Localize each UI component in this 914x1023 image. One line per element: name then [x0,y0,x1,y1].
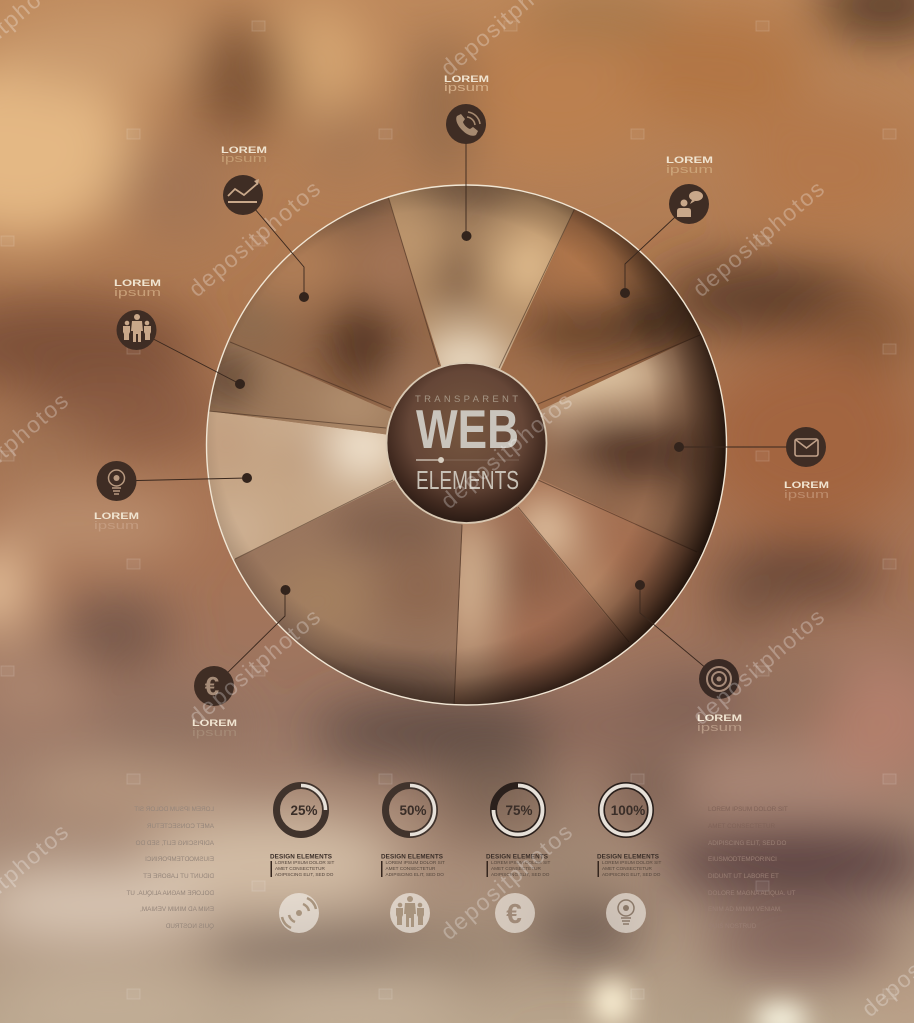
segment: right [539,347,719,541]
watermark text: depositphotos [687,176,829,302]
watermark text: depositphotos [435,819,577,945]
text block: mirrored list: LOREM IPSUM DOLOR SIT [134,806,214,813]
hub title: ELEMENTS [416,465,519,495]
callout: mail: LOREM [784,480,829,491]
progress ring: 100% [602,786,650,834]
text block: right list: LOREM IPSUM DOLOR SIT [708,806,788,813]
segment: lower left [234,480,462,693]
caption: ring 2: DESIGN ELEMENTS [381,854,443,860]
callout: euro: € [205,671,219,701]
segment: left band [210,342,392,434]
text block: right list: ENIM AD MINIM VENIAM, [708,906,782,913]
progress ring: 50% [386,786,434,834]
icon: euro [495,893,535,933]
progress ring: 100%: 100% [611,803,645,818]
caption: ring 1: DESIGN ELEMENTS [270,854,332,860]
outer ring [206,185,726,705]
progress ring: 75% [494,786,542,834]
caption: ring 3: LOREM IPSUM DOLOR SIT [491,860,551,865]
text block: mirrored list: QUIS NOSTRUD [165,923,214,930]
segment dividers [208,196,700,706]
pie wheel [206,184,728,706]
callout: euro [192,585,290,739]
watermark text: depositphotos [183,176,325,302]
caption: ring 2 [381,854,445,877]
text block: right list: AMET CONSECTETUR [708,823,776,830]
segment: left bright [207,411,395,560]
callout: chart [221,145,309,302]
text block: mirrored list: DOLORE MAGNA ALIQUA. UT [126,890,214,897]
caption: ring 1 [270,854,335,877]
callout: phone: ipsum [444,82,489,94]
rim shadow [206,185,726,705]
hub title: WEB [416,398,519,460]
text block: mirrored list: DIDUNT UT LABORE ET [143,873,214,880]
callout: chart: LOREM [221,145,267,156]
text block: mirrored list: EIUSMODTEMPORINCI [145,856,214,863]
hub title: TRANSPARENT [415,394,518,405]
segment: top bright [389,186,574,370]
segment: lower right [516,480,644,614]
progress ring: 25%: 25% [290,803,318,818]
callout: phone: LOREM [444,74,489,85]
watermark text: depositphotos [435,388,577,514]
progress ring: 25% [276,786,326,834]
callout: group: ipsum [114,287,161,299]
callout: bulb: LOREM [94,511,139,522]
icon: bulb [606,893,646,933]
caption: ring 4 [597,854,662,877]
bottom light spots [592,980,807,1023]
text block: right list: EIUSMODTEMPORINCI [708,856,777,863]
callout: target: LOREM [697,713,742,724]
icon: signal [279,893,319,933]
caption: ring 3: AMET CONSECTETUR [491,866,542,871]
caption: ring 2: ADIPISCING ELIT, SED DO [386,872,444,877]
text block: mirrored list [126,806,214,930]
callout: target: ipsum [697,722,742,734]
callout: euro: ipsum [192,727,237,739]
callout: group [114,278,245,389]
icon: people [390,893,430,933]
callout: person chat [620,155,713,298]
text block: right list: ADIPISCING ELIT, SED DO [708,840,786,847]
callout: mail: ipsum [784,489,829,501]
callout: group: LOREM [114,278,161,289]
caption: ring 3 [486,854,551,877]
progress ring: 50%: 50% [399,803,427,818]
caption: ring 1: AMET CONSECTETUR [275,866,326,871]
callout: bulb [94,461,252,532]
caption: ring 3: DESIGN ELEMENTS [486,854,548,860]
text block: right list [708,806,796,930]
caption: ring 1: ADIPISCING ELIT, SED DO [275,872,334,877]
callout: chart: ipsum [221,153,267,165]
caption: ring 1: LOREM IPSUM DOLOR SIT [275,860,335,865]
text block: right list: QUIS NOSTRUD [708,923,757,930]
hub title [415,394,519,495]
text block: mirrored list: AMET CONSECTETUR [146,823,214,830]
text block: right list: DOLORE MAGNA ALIQUA. UT [708,890,796,897]
caption: ring 4: ADIPISCING ELIT, SED DO [602,872,661,877]
segment: bottom [454,507,604,704]
text block: right list: DIDUNT UT LABORE ET [708,873,779,880]
segment: upper right [500,210,691,410]
center hub [386,363,546,523]
caption: ring 3: ADIPISCING ELIT, SED DO [491,872,550,877]
icon: euro: € [506,898,522,929]
callout: mail [674,427,829,501]
caption: ring 4: LOREM IPSUM DOLOR SIT [602,860,662,865]
callout: euro: LOREM [192,718,237,729]
caption: ring 2: LOREM IPSUM DOLOR SIT [386,860,445,865]
callout: phone [444,74,489,241]
text block: mirrored list: ADIPISCING ELIT, SED DO [136,840,214,847]
callout: bulb: ipsum [94,520,139,532]
caption: ring 4: AMET CONSECTETUR [602,866,653,871]
callout: person chat: ipsum [666,164,713,176]
caption: ring 4: DESIGN ELEMENTS [597,854,659,860]
watermark text: depositphotos [687,604,829,730]
segment: upper left [229,198,441,412]
callout: person chat: LOREM [666,155,713,166]
progress ring: 75%: 75% [505,803,533,818]
callout: target [635,580,742,734]
caption: ring 2: AMET CONSECTETUR [386,866,436,871]
text block: mirrored list: ENIM AD MINIM VENIAM, [140,906,214,913]
watermark text: depositphotos [183,604,325,730]
